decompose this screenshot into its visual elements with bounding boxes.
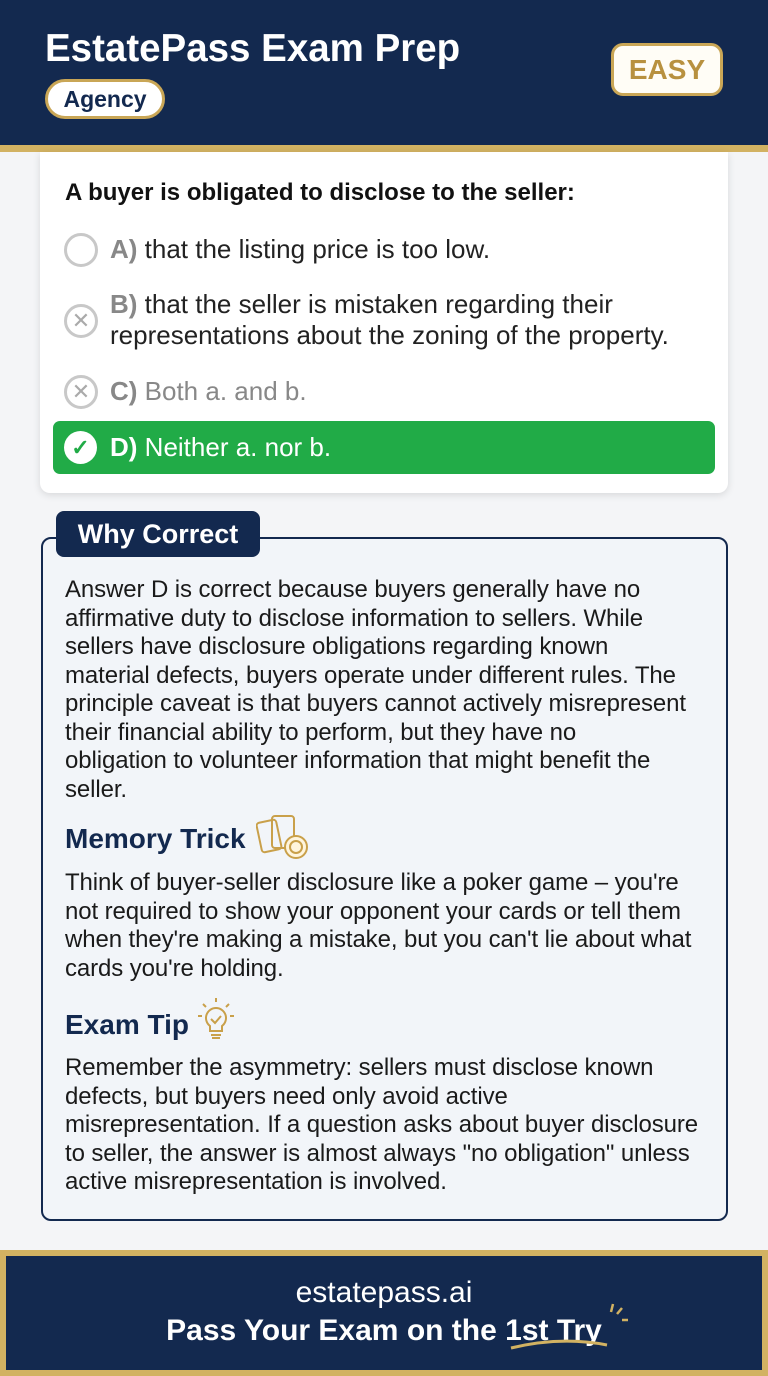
exam tip text: active misrepresentation is involved. <box>65 1168 447 1195</box>
memory trick text <box>65 869 692 982</box>
why correct text: seller. <box>65 776 127 802</box>
exam tip text: Remember the asymmetry: sellers must disclose known <box>65 1054 653 1081</box>
option B <box>64 289 669 350</box>
why correct tab: Why Correct <box>78 519 238 549</box>
why correct text <box>65 576 686 802</box>
memory trick heading: Memory Trick <box>65 823 246 854</box>
option D correct: D) Neither a. nor b. <box>110 432 331 462</box>
why correct text: their financial ability to perform, but they have no <box>65 718 576 746</box>
option D correct: ✓ <box>71 435 90 460</box>
why correct text: obligation to volunteer information that might benefit the <box>65 747 650 774</box>
why correct tab <box>56 511 260 557</box>
memory trick text: Think of buyer-seller disclosure like a poker game – you're <box>65 869 679 896</box>
why correct text: principle caveat is that buyers cannot actively misrepresent <box>65 690 686 717</box>
exam tip text: defects, but buyers need only avoid active <box>65 1082 508 1110</box>
difficulty badge <box>611 43 723 96</box>
option D correct <box>53 421 715 474</box>
option B: ✕ <box>72 308 90 333</box>
underline accent <box>510 1304 628 1350</box>
why correct text: sellers have disclosure obligations regarding known <box>65 633 608 660</box>
category pill: Agency <box>63 86 147 112</box>
why correct text: affirmative duty to disclose information to sellers. While <box>65 604 643 632</box>
header <box>0 0 768 152</box>
memory trick text: cards you're holding. <box>65 954 284 982</box>
question text: A buyer is obligated to disclose to the seller: <box>65 179 575 206</box>
exam tip text: misrepresentation. If a question asks about buyer disclosure <box>65 1111 698 1138</box>
category pill <box>45 79 165 119</box>
option C: C) Both a. and b. <box>110 376 307 406</box>
icon: cards and chip <box>256 815 308 859</box>
title: EstatePass Exam Prep <box>45 27 460 70</box>
question card <box>40 152 728 493</box>
memory trick text: not required to show your opponent your cards or tell them <box>65 898 681 924</box>
footer url: estatepass.ai <box>296 1276 472 1309</box>
footer <box>0 1250 768 1376</box>
option C: ✕ <box>72 379 90 404</box>
explanation panel <box>41 537 728 1221</box>
exam tip text <box>65 1054 698 1195</box>
why correct text: material defects, buyers operate under different rules. The <box>65 662 676 688</box>
memory trick text: when they're making a mistake, but you can't lie about what <box>65 926 691 953</box>
option B: B) that the seller is mistaken regarding their <box>110 289 613 319</box>
footer tagline: Pass Your Exam on the 1st Try <box>166 1314 602 1347</box>
why correct text: Answer D is correct because buyers generally have no <box>65 576 640 603</box>
option A: A) that the listing price is too low. <box>110 234 490 264</box>
exam tip heading: Exam Tip <box>65 1009 189 1040</box>
exam tip text: to seller, the answer is almost always "no obligation" unless <box>65 1140 690 1166</box>
option B: representations about the zoning of the property. <box>110 320 669 350</box>
icon: lightbulb <box>198 998 234 1039</box>
difficulty badge: EASY <box>629 54 705 85</box>
